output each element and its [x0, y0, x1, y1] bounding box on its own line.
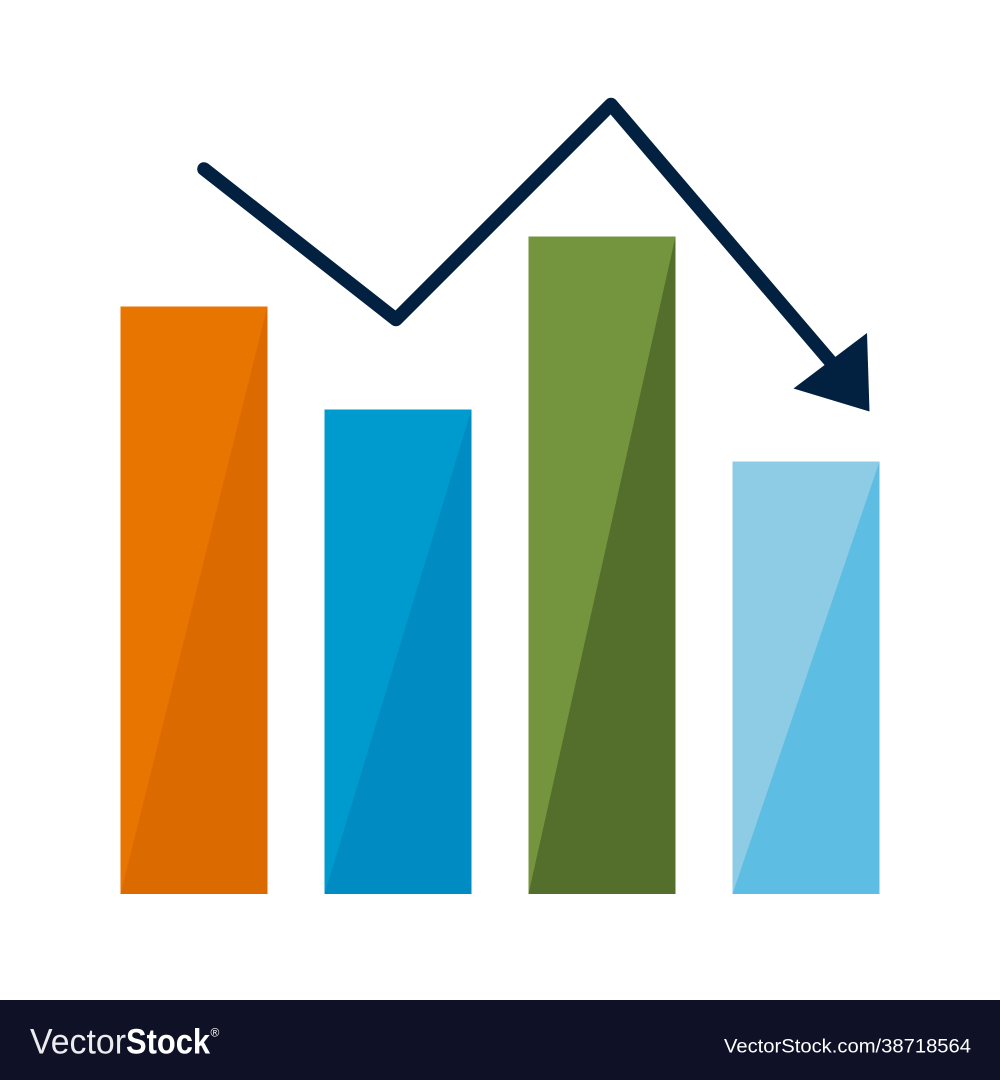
footer logo text: Vector	[30, 1022, 126, 1062]
footer logo text: ®	[210, 1026, 220, 1040]
footer image id: VectorStock.com/38718564	[724, 1037, 971, 1058]
footer logo text	[30, 1022, 220, 1062]
bar: light blue	[732, 462, 880, 894]
arrow: downward trend	[204, 104, 870, 412]
bar: blue	[324, 410, 472, 894]
footer logo text: Stock	[126, 1022, 210, 1062]
bar chart	[120, 236, 880, 894]
bar: orange	[120, 306, 268, 894]
bar: green	[528, 236, 676, 894]
footer bar	[0, 1000, 1000, 1080]
